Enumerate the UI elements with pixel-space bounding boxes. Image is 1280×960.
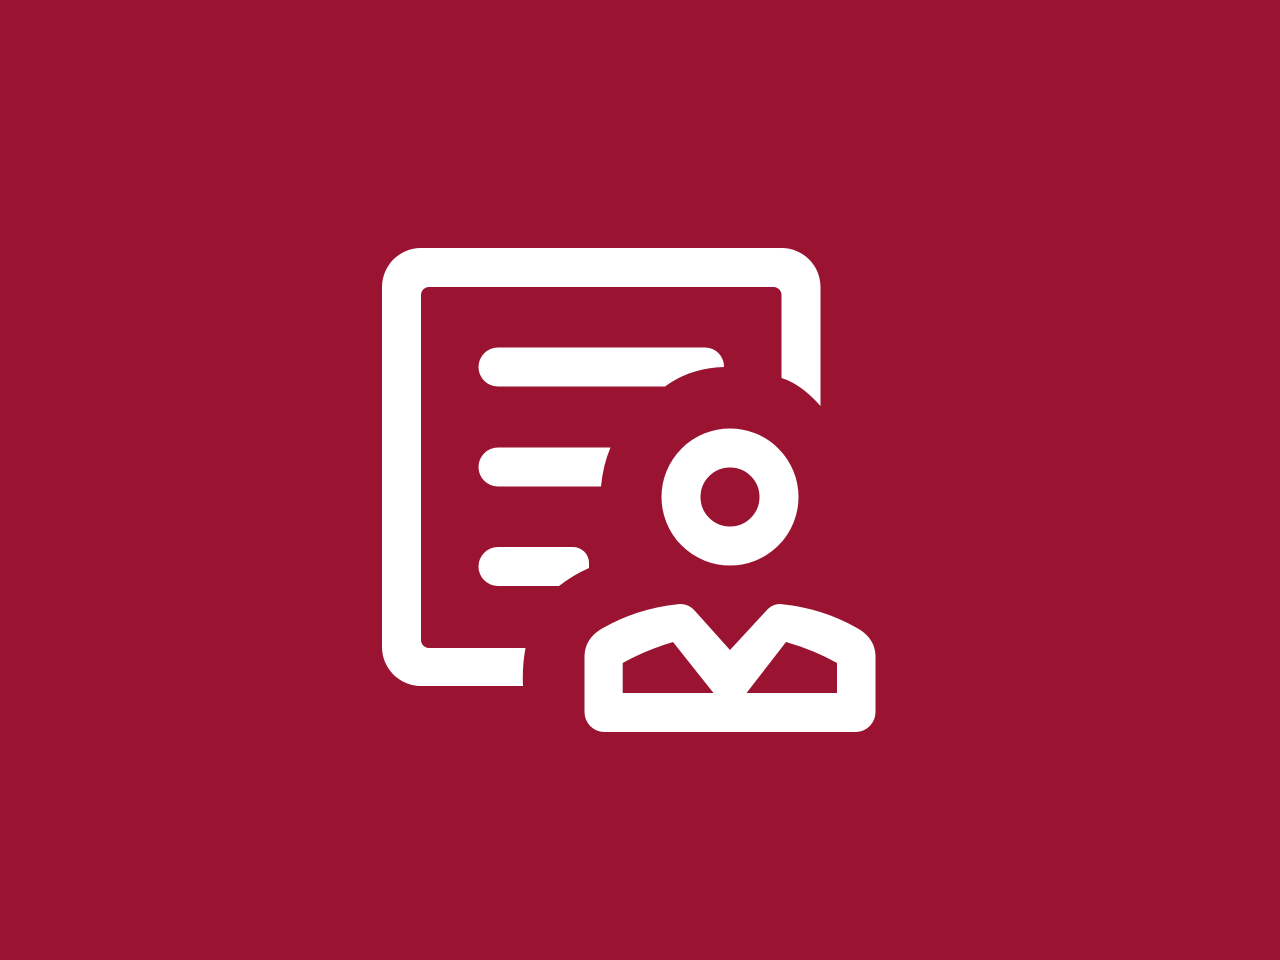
icon: document frame <box>382 248 820 686</box>
text line: second document line <box>478 448 610 486</box>
icon: person shoulders <box>584 604 876 732</box>
text line: third document line <box>478 547 589 586</box>
icon: person head <box>681 448 779 546</box>
text line: first document line <box>478 348 724 386</box>
icon: document with person <box>382 248 876 732</box>
